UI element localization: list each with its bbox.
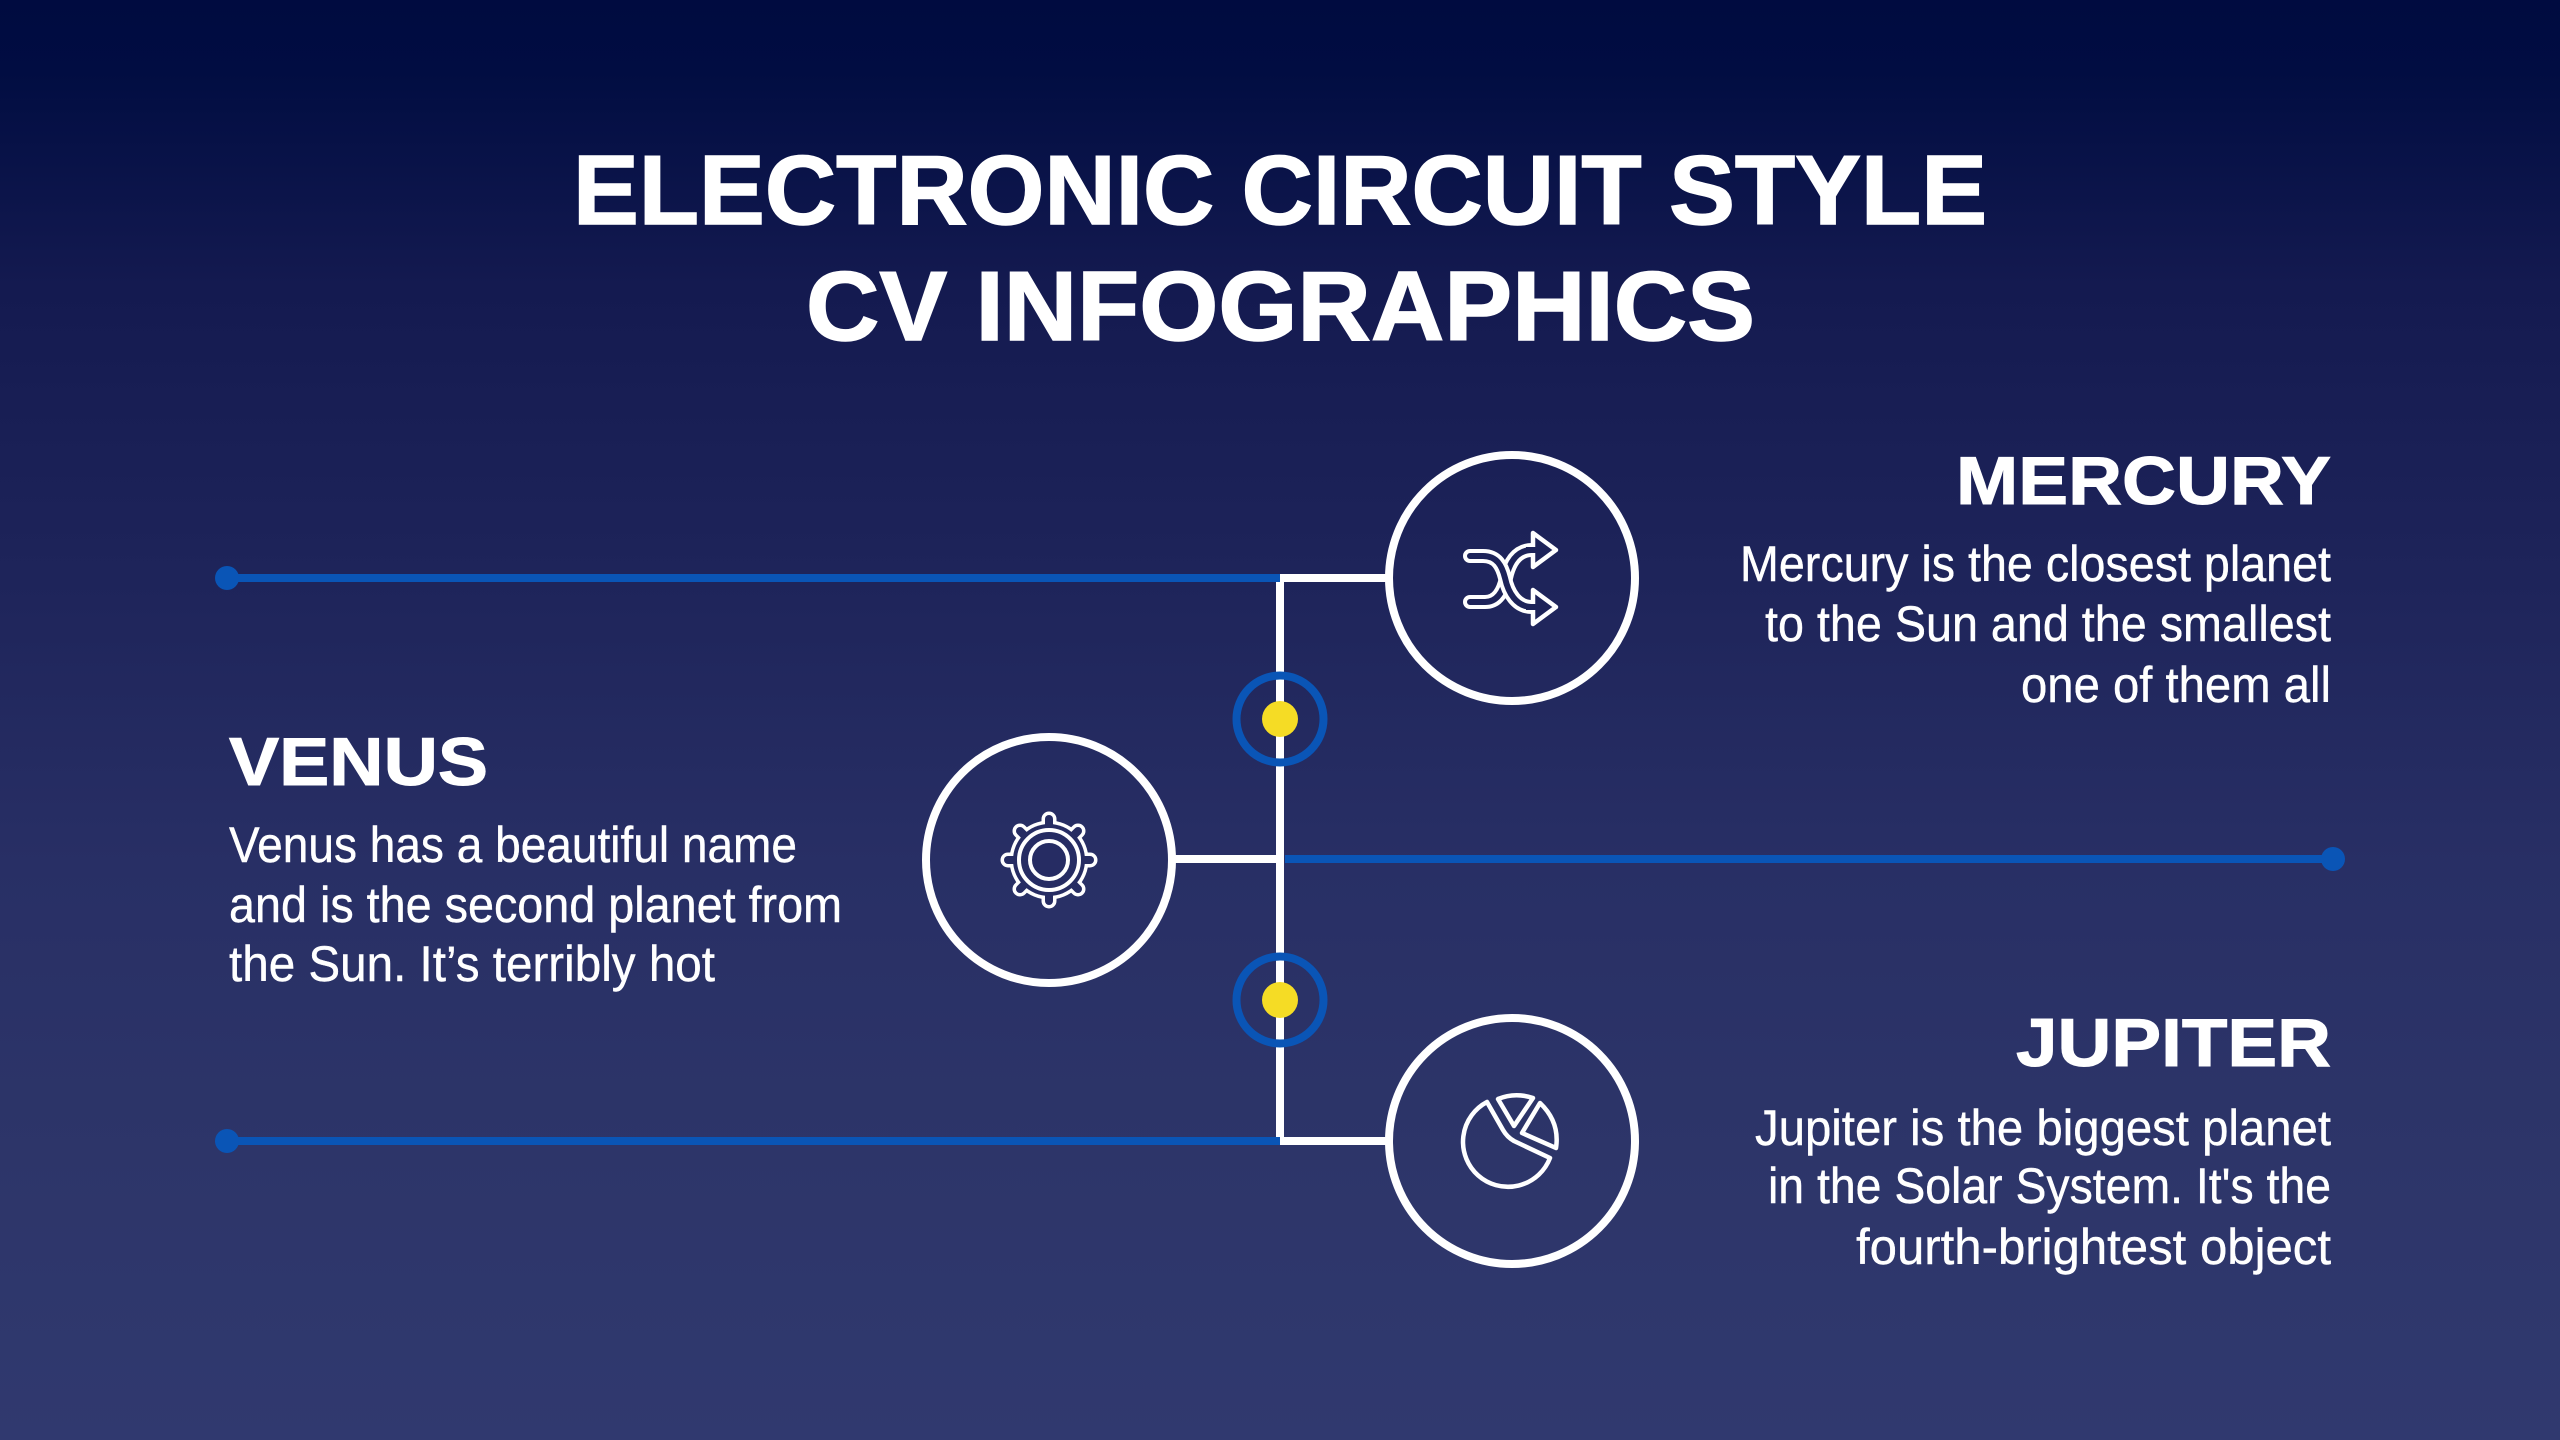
node: upper junction	[1236, 676, 1324, 762]
description: mercury: Mercury is the closest planet	[1740, 536, 2331, 592]
connector: mercury	[1280, 574, 1389, 582]
description: mercury: to the Sun and the smallest	[1765, 596, 2331, 652]
blue line: middle right	[1285, 847, 2345, 871]
description: mercury: one of them all	[2021, 657, 2331, 713]
description: venus: Venus has a beautiful name	[229, 817, 797, 873]
title	[573, 135, 1987, 361]
circle: jupiter	[1389, 1018, 1635, 1264]
description: venus: and is the second planet from	[229, 877, 842, 933]
description: jupiter	[1755, 1100, 2331, 1275]
description: jupiter: fourth-brightest object	[1856, 1219, 2331, 1275]
heading: jupiter: JUPITER	[2016, 1005, 2331, 1081]
connector: venus	[1172, 855, 1284, 863]
description: venus	[229, 817, 842, 992]
description: jupiter: in the Solar System. It's the	[1768, 1158, 2331, 1214]
icon: gear	[1008, 819, 1090, 901]
text block: jupiter	[1755, 1005, 2331, 1275]
icon: pie chart	[1463, 1095, 1557, 1187]
description: mercury	[1740, 536, 2331, 713]
blue line: top left	[215, 566, 1280, 590]
title: ELECTRONIC CIRCUIT STYLE	[573, 135, 1987, 245]
text block: venus	[229, 724, 842, 992]
title: CV INFOGRAPHICS	[806, 251, 1755, 361]
heading: venus: VENUS	[229, 724, 488, 800]
node: lower junction	[1236, 956, 1324, 1044]
text block: mercury	[1740, 443, 2331, 713]
icon: shuffle arrows	[1470, 533, 1556, 624]
circle: venus	[926, 737, 1172, 983]
circuit trunk line	[1276, 578, 1284, 1141]
blue line: bottom left	[215, 1129, 1280, 1153]
description: jupiter: Jupiter is the biggest planet	[1755, 1100, 2331, 1156]
description: venus: the Sun. It’s terribly hot	[229, 936, 715, 992]
heading: mercury: MERCURY	[1956, 443, 2331, 519]
connector: jupiter	[1280, 1137, 1389, 1145]
circle: mercury	[1389, 455, 1635, 701]
